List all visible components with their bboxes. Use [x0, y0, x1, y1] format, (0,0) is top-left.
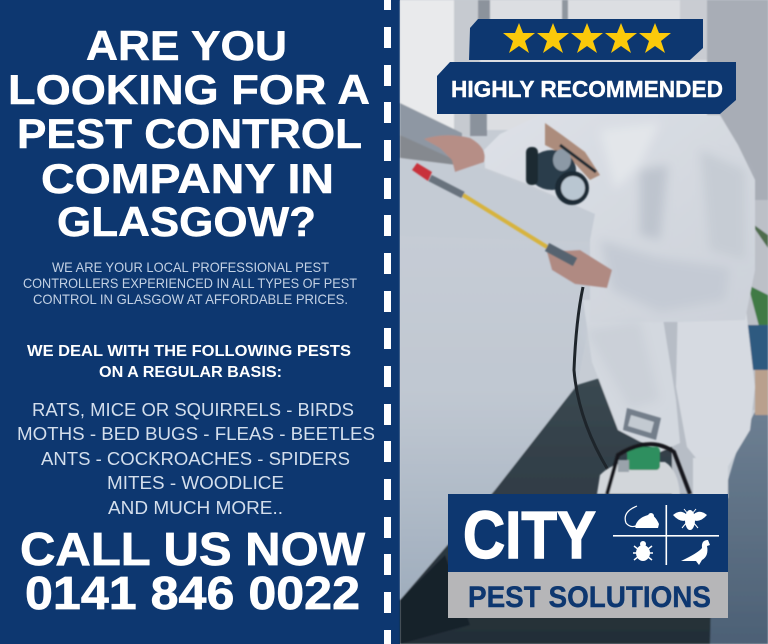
- dashed divider: [384, 0, 391, 644]
- icon: bee: [673, 509, 707, 530]
- badge: five stars: [469, 19, 703, 60]
- arm and torso: [484, 115, 755, 322]
- suit fold shading: [585, 122, 745, 410]
- icon: pigeon: [681, 540, 710, 565]
- intro paragraph: CONTROLLERS EXPERIENCED IN ALL TYPES OF PEST: [23, 275, 357, 291]
- logo word city: CITY: [463, 498, 596, 573]
- logo words pest solutions: PEST SOLUTIONS: [468, 581, 711, 614]
- heading: ARE YOU: [86, 22, 287, 69]
- photo: pest controller spraying: [400, 0, 768, 644]
- spray lance: [412, 163, 575, 262]
- logo: City Pest Solutions: [448, 494, 728, 618]
- badge: highly recommended: [437, 62, 736, 114]
- background between legs: [650, 310, 700, 494]
- pest list: AND MUCH MORE..: [108, 498, 283, 518]
- heading: PEST CONTROL: [17, 110, 362, 157]
- call to action: 0141 846 0022: [25, 567, 360, 619]
- left leg: [583, 300, 680, 452]
- heading: COMPANY IN: [41, 155, 334, 202]
- intro paragraph: CONTROL IN GLASGOW AT AFFORDABLE PRICES.: [33, 291, 348, 307]
- pest list: [17, 400, 375, 518]
- plant and props: [750, 222, 768, 248]
- boot: [693, 458, 728, 498]
- icon: bug: [633, 541, 653, 561]
- hose: [574, 287, 608, 470]
- star ratings: [503, 23, 671, 53]
- hand right: [547, 250, 612, 288]
- icon: mouse: [625, 506, 659, 528]
- call to action: [20, 523, 366, 619]
- hand left: [424, 135, 485, 172]
- heading: LOOKING FOR A: [8, 66, 370, 113]
- subheading: [27, 343, 351, 381]
- floor: [400, 378, 730, 644]
- intro paragraph: WE ARE YOUR LOCAL PROFESSIONAL PEST: [52, 259, 329, 275]
- intro paragraph: [23, 259, 357, 307]
- heading: [8, 22, 370, 245]
- pest list: RATS, MICE OR SQUIRRELS - BIRDS: [32, 400, 354, 420]
- respirator mask: [526, 123, 600, 205]
- badge: highly recommended: HIGHLY RECOMMENDED: [451, 76, 723, 102]
- panel: navy text panel: [0, 0, 400, 644]
- logo cross: [613, 505, 719, 565]
- sill: [400, 103, 462, 168]
- pest list: MITES - WOODLICE: [107, 473, 284, 493]
- heading: GLASGOW?: [57, 198, 316, 245]
- subheading: WE DEAL WITH THE FOLLOWING PESTS: [27, 343, 351, 360]
- pest list: MOTHS - BED BUGS - FLEAS - BEETLES: [17, 424, 375, 444]
- right leg: [676, 300, 755, 468]
- call to action: CALL US NOW: [20, 523, 366, 575]
- spray tank: [597, 408, 690, 494]
- window background: [400, 0, 456, 140]
- subheading: ON A REGULAR BASIS:: [99, 364, 282, 381]
- pest list: ANTS - COCKROACHES - SPIDERS: [41, 449, 350, 469]
